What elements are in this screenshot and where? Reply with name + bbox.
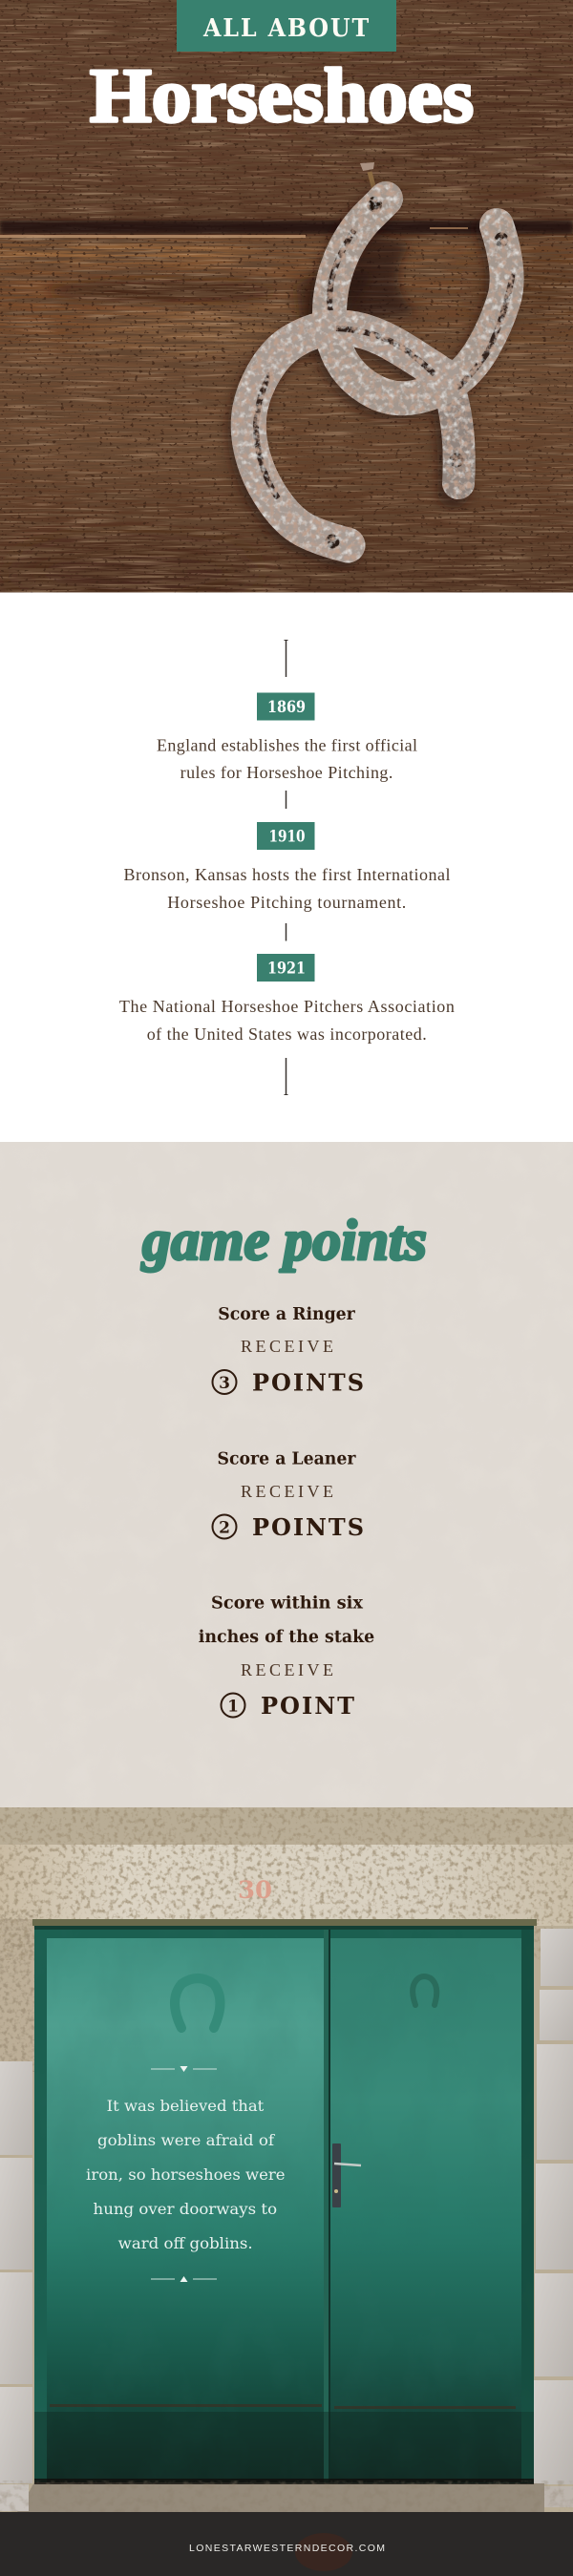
icon: door handle <box>332 2143 361 2207</box>
timeline entry: 1910: Horseshoe Pitching tournament. <box>167 893 406 912</box>
score item: within six inches: Score within six <box>211 1594 364 1614</box>
timeline entry: 1869: England establishes the first official <box>157 735 417 754</box>
score item: leaner <box>212 1449 366 1541</box>
text block: goblins fact: iron, so horseshoes were <box>86 2165 286 2184</box>
icon: right door horseshoe <box>413 1976 436 2005</box>
ornament: top divider <box>151 2066 217 2072</box>
icon: number 2: 2 <box>219 1518 230 1537</box>
score item: leaner: POINTS <box>252 1513 366 1541</box>
score item: within six inches <box>199 1594 374 1720</box>
timeline entry: 1869 <box>157 693 417 782</box>
text block: goblins fact: It was believed that <box>107 2097 265 2115</box>
score item: ringer <box>212 1305 366 1396</box>
score item: within six inches: RECEIVE <box>241 1660 333 1679</box>
panel: game points <box>0 1142 573 1807</box>
icon: nail <box>360 162 378 204</box>
timeline connector: top <box>285 640 288 677</box>
score item: ringer: RECEIVE <box>241 1337 333 1356</box>
icon: interlocked horseshoes on nail <box>244 162 513 551</box>
timeline entry: 1921: The National Horseshoe Pitchers Association <box>119 997 455 1016</box>
stone blocks <box>0 1929 573 2484</box>
icon: number 1: 1 <box>227 1698 239 1717</box>
timeline connector: bottom <box>285 1058 288 1095</box>
heading: game points: game points <box>140 1209 427 1272</box>
timeline entry: 1921: of the United States was incorporated. <box>147 1024 427 1044</box>
score item: leaner: RECEIVE <box>241 1482 333 1501</box>
panel: timeline <box>0 592 573 1142</box>
sill <box>17 2482 544 2512</box>
score item: within six inches: POINT <box>261 1692 356 1720</box>
painted number: 30 <box>238 1876 272 1904</box>
timeline entry: 1910: Bronson, Kansas hosts the first International <box>124 865 451 884</box>
text block: goblins fact: goblins were afraid of <box>97 2131 275 2149</box>
score item: ringer: POINTS <box>252 1369 366 1396</box>
timeline entry: 1910 <box>124 822 451 912</box>
panel: hero wood photo <box>0 0 573 602</box>
icon: number 1 <box>222 1694 244 1717</box>
icon: hanging U shoe <box>329 197 513 398</box>
tag: all about: ALL ABOUT <box>202 14 371 43</box>
tag: all about <box>177 0 396 52</box>
footer url: LONESTARWESTERNDECOR.COM <box>189 2543 385 2554</box>
timeline connector <box>285 923 286 941</box>
title: Horseshoes <box>90 54 474 138</box>
door <box>32 1919 537 2484</box>
score item: ringer: Score a Ringer <box>218 1305 356 1324</box>
timeline entry: 1921 <box>119 954 455 1044</box>
text block: goblins fact <box>86 2097 286 2252</box>
timeline entry: 1869: 1869 <box>267 698 306 717</box>
text block: goblins fact: hung over doorways to <box>94 2200 277 2218</box>
icon: rear shoe leg <box>445 374 459 483</box>
ground <box>0 2512 573 2576</box>
timeline entry: 1910: 1910 <box>269 827 306 846</box>
timeline entry: 1921: 1921 <box>267 959 306 978</box>
timeline connector <box>285 791 286 809</box>
panel: green door photo <box>0 1807 573 2576</box>
icon: number 2 <box>212 1514 237 1539</box>
timeline entry: 1869: rules for Horseshoe Pitching. <box>180 763 393 782</box>
icon: front inverted shoe <box>248 327 464 548</box>
score item: leaner: Score a Leaner <box>218 1449 356 1468</box>
icon: left door horseshoe <box>175 1978 220 2028</box>
icon: number 3: 3 <box>219 1374 230 1393</box>
score item: within six inches: inches of the stake <box>199 1628 374 1647</box>
ornament: bottom divider <box>151 2276 217 2282</box>
text block: goblins fact: ward off goblins. <box>118 2234 253 2252</box>
icon: number 3 <box>212 1370 237 1394</box>
